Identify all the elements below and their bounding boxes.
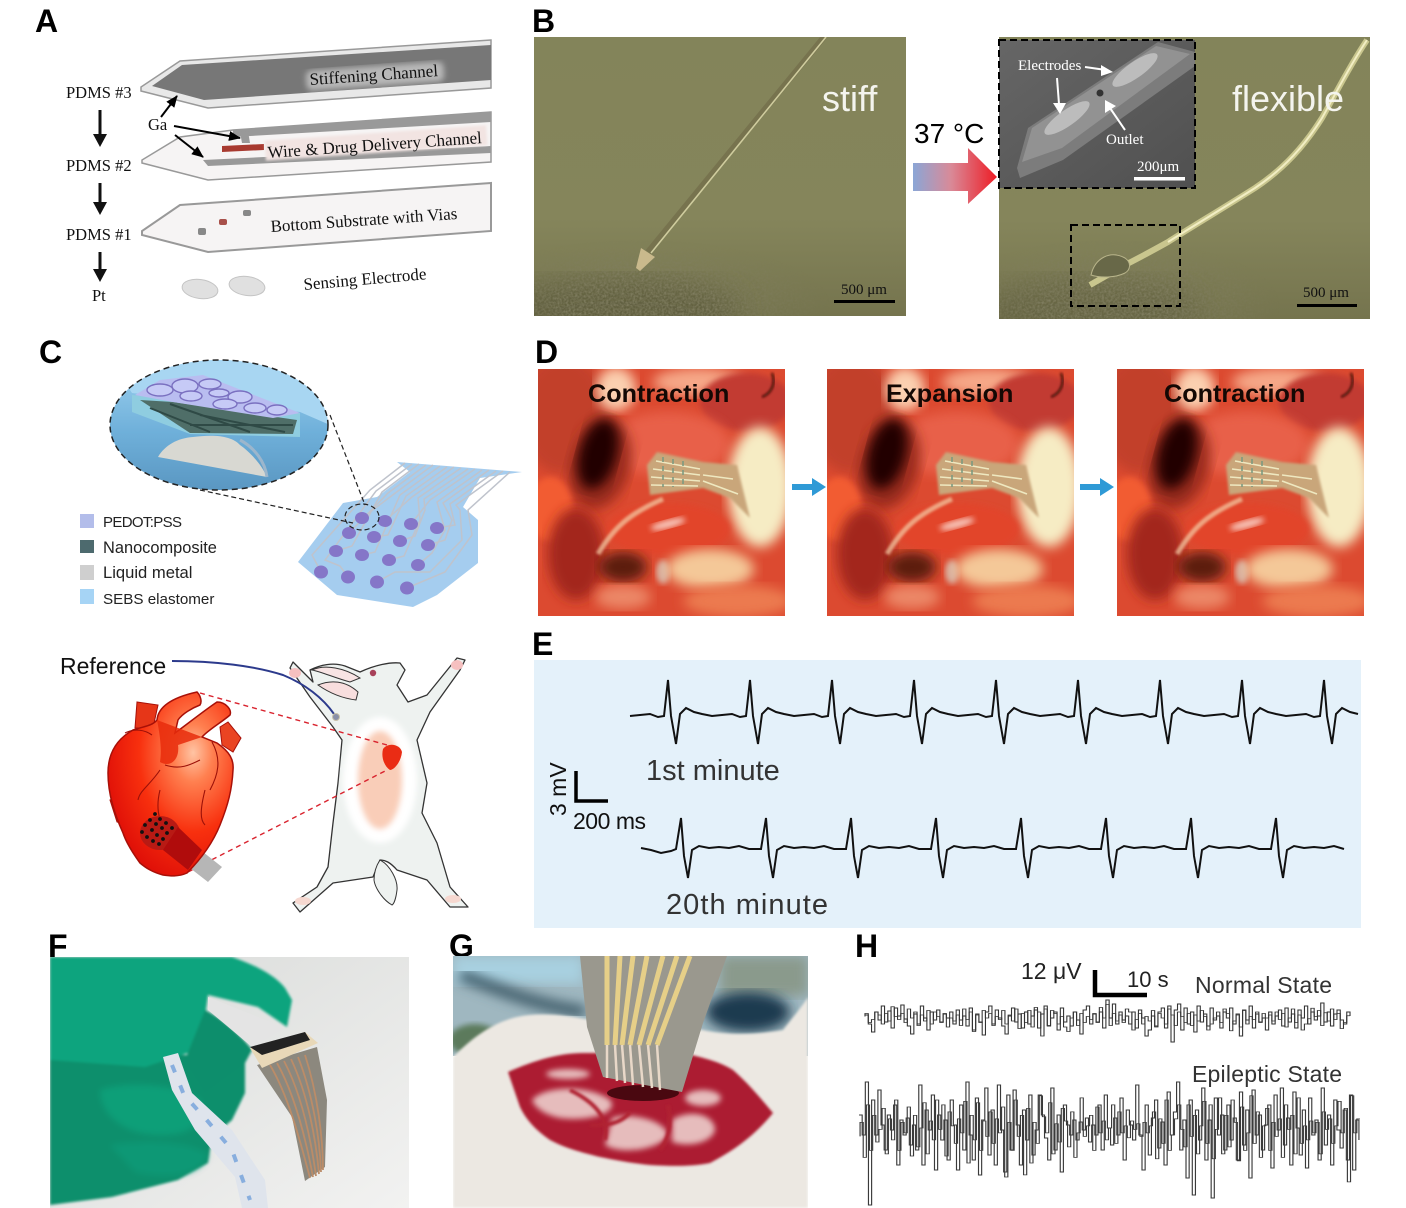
scale bar: 10 s [1127,967,1169,992]
ECG trace 1st minute [630,680,1358,744]
scale bar [1021,958,1169,995]
layer labels [66,83,168,305]
ECG trace 20th minute [641,818,1344,878]
projection lines [188,693,387,872]
scale bar: 500 μm [841,282,887,298]
arrow: contraction to expansion [792,478,826,496]
caption 1st minute: 1st minute [646,755,780,787]
materials legend: SEBS elastomer [103,591,214,608]
materials legend [80,514,217,608]
magnified cross-section [110,360,330,490]
SEM inset: Outlet [1106,132,1144,148]
label B: B [532,3,555,39]
photo: contraction 1 [518,354,793,617]
layer: bottom substrate: Bottom Substrate with Vias [270,204,458,236]
caption epileptic state: Epileptic State [1192,1061,1342,1087]
photo captions: Expansion [886,380,1013,408]
arrow: heating transition [913,148,997,204]
sensing electrodes: Sensing Electrode [303,264,427,294]
dashed region box [1071,225,1180,306]
label C: C [39,334,62,370]
layer labels: PDMS #3 [66,83,132,102]
EEG trace normal [865,1000,1350,1042]
layer labels: Pt [92,286,106,305]
layer: wire and drug delivery channel: Wire & Drug Delivery Channel [267,128,483,162]
reference wire [172,661,340,720]
layer labels: Ga [148,115,168,134]
layer: bottom substrate [142,183,491,252]
label stiff: stiff [822,78,878,119]
reference label: Reference [60,653,166,679]
label F: F [48,928,68,964]
leader lines [200,415,379,530]
chart background [534,660,1361,928]
layer: wire and drug delivery channel [142,112,491,180]
layer labels: PDMS #2 [66,156,132,175]
label E: E [532,626,553,662]
photo: flexible probe [999,37,1370,319]
panel B: stiff to flexible probe [534,10,1370,319]
SEM inset [999,40,1195,188]
flexible array device [298,462,522,607]
photo G [449,956,808,1208]
caption 20th minute: 20th minute [666,889,828,921]
temperature label: 37 °C [914,118,984,149]
panel A: exploded layer diagram [35,3,491,305]
label flexible: flexible [1232,78,1344,119]
sensing electrodes [181,264,427,301]
layer labels: PDMS #1 [66,225,132,244]
photo captions: Contraction [588,380,729,408]
scale bar [834,284,895,303]
photo: expansion [807,354,1082,617]
scale bar: 500 μm [1303,285,1349,301]
panel D: heart contraction photos [518,334,1372,617]
materials legend: Nanocomposite [103,539,217,557]
layer: stiffening channel [141,40,491,108]
arrow: expansion to contraction [1080,478,1114,496]
panel G: device on exposed brain [449,928,808,1208]
rabbit illustration [289,658,468,912]
scale bar: 200 ms [573,808,646,834]
enlarged heart [108,692,241,882]
photo F [50,957,409,1208]
label H: H [855,928,878,964]
materials legend: Liquid metal [103,563,192,582]
photo: contraction 2 [1097,354,1372,617]
label G: G [449,928,474,964]
SEM inset: Electrodes [1018,58,1081,74]
label D: D [535,334,558,370]
scale bar: 3 mV [545,762,571,816]
photo: stiff probe [534,37,906,316]
EEG trace epileptic [859,1082,1360,1205]
layer: stiffening channel: Stiffening Channel [309,61,439,89]
panel C: electrode array and rabbit implant [39,334,522,912]
panel F: device in gloved hand [48,928,409,1208]
materials legend: PEDOT:PSS [103,514,182,531]
scale bar [545,762,646,834]
photo captions [588,380,1305,408]
label A: A [35,3,58,39]
panel H: EEG recordings [855,928,1360,1205]
stacking arrows [93,110,107,282]
photo captions: Contraction [1164,380,1305,408]
caption normal state: Normal State [1195,972,1332,998]
SEM inset: 200μm [1137,159,1180,175]
scale bar: 12 μV [1021,958,1082,984]
panel E: ECG recordings [532,626,1361,928]
Ga pointer arrows [161,96,240,157]
scale bar [1297,288,1357,307]
